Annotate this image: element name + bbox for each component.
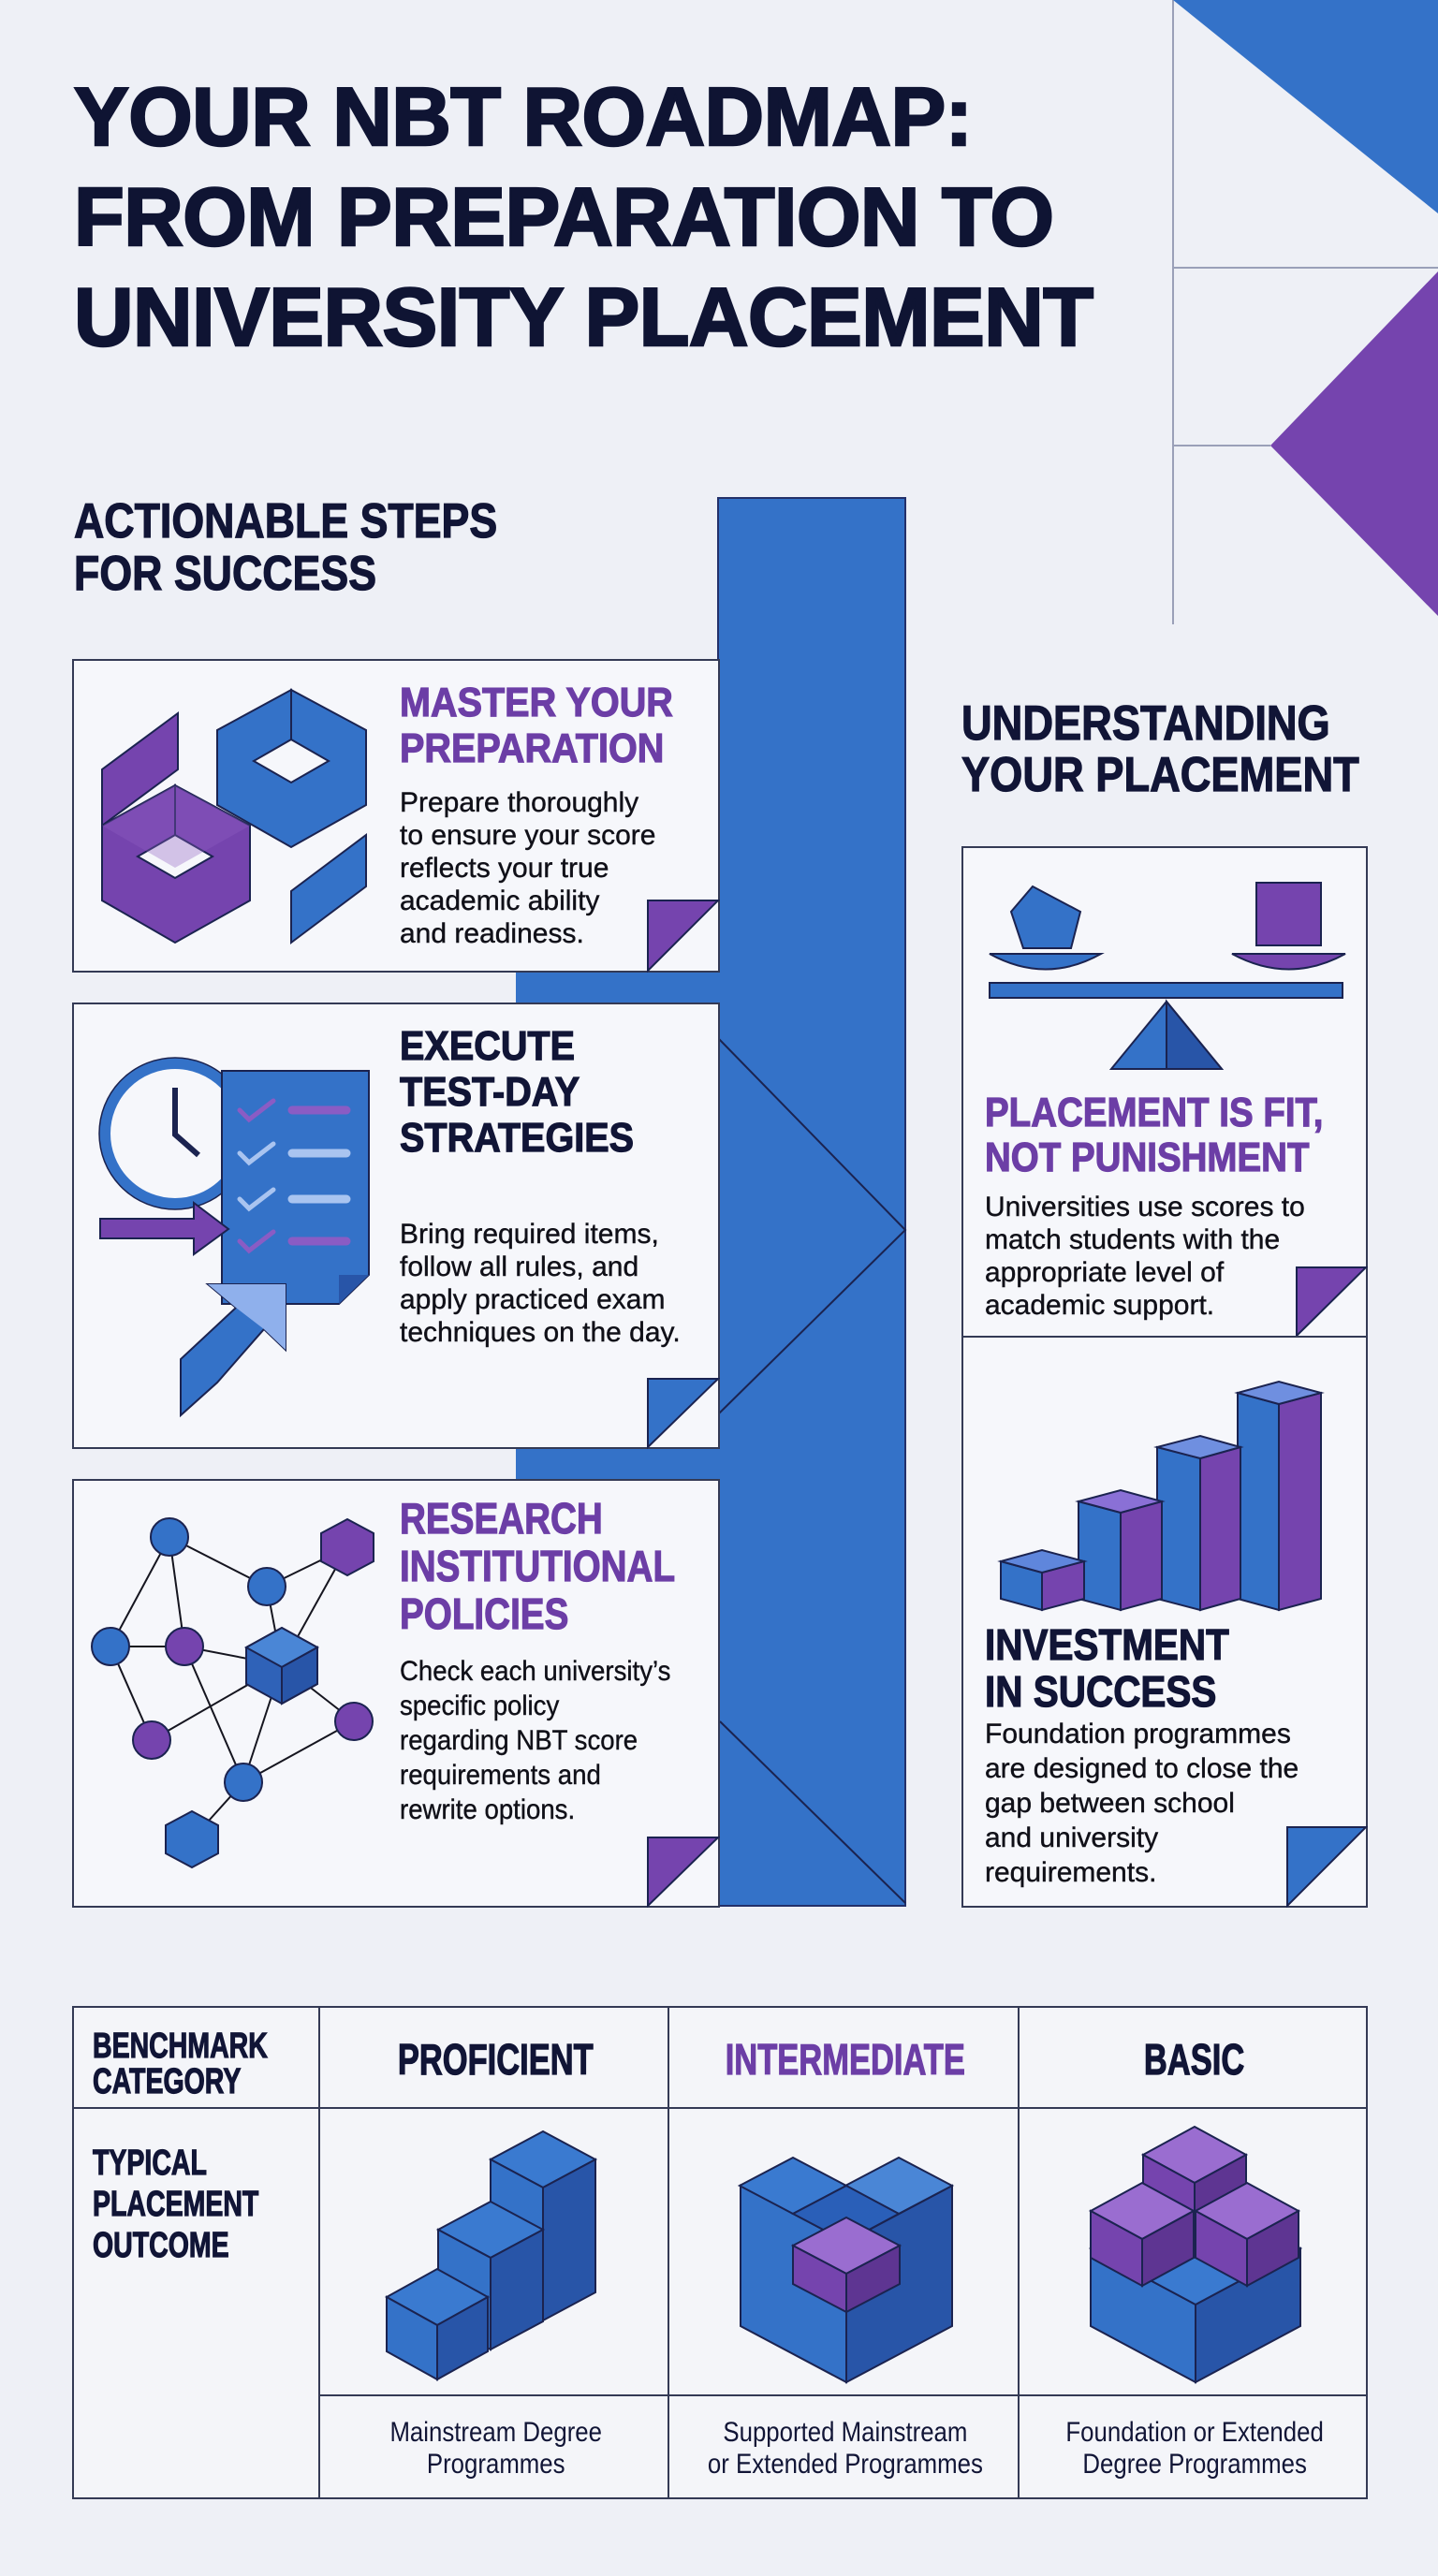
heading: IN SUCCESS bbox=[985, 1667, 1216, 1716]
panel: research institutional policies bbox=[72, 1479, 720, 1908]
body text: appropriate level of bbox=[985, 1257, 1224, 1288]
body text bbox=[400, 787, 655, 949]
heading: NOT PUNISHMENT bbox=[985, 1134, 1309, 1180]
body text: to ensure your score bbox=[400, 820, 655, 851]
panel: placement is fit bbox=[961, 846, 1368, 1338]
heading bbox=[399, 1023, 634, 1161]
column header: basic: BASIC bbox=[1144, 2035, 1245, 2084]
heading: PLACEMENT IS FIT, bbox=[985, 1090, 1323, 1135]
body text: are designed to close the bbox=[985, 1753, 1299, 1784]
body text: gap between school bbox=[985, 1788, 1235, 1819]
row label: benchmark category: BENCHMARK bbox=[93, 2027, 268, 2066]
heading bbox=[985, 1090, 1323, 1180]
row label: typical placement outcome bbox=[92, 2144, 258, 2265]
icon: interlocking rings bbox=[101, 688, 367, 944]
outcome: mainstream: Programmes bbox=[427, 2449, 565, 2479]
panel: master your preparation bbox=[72, 659, 720, 973]
corner fold bbox=[647, 900, 720, 973]
body text bbox=[985, 1719, 1299, 1888]
column header: proficient: PROFICIENT bbox=[398, 2035, 594, 2084]
row label: benchmark category bbox=[93, 2027, 268, 2101]
corner fold bbox=[1286, 1826, 1368, 1908]
heading: understanding your placement: YOUR PLACEMENT bbox=[961, 748, 1359, 802]
heading: actionable steps bbox=[74, 494, 497, 601]
heading: INSTITUTIONAL bbox=[400, 1542, 675, 1590]
panel: execute test-day strategies bbox=[72, 1003, 720, 1449]
body text: requirements and bbox=[400, 1760, 601, 1791]
title: UNIVERSITY PLACEMENT bbox=[74, 271, 1093, 363]
outcome: foundation: Degree Programmes bbox=[1082, 2449, 1307, 2479]
outcome: supported: or Extended Programmes bbox=[708, 2449, 983, 2479]
body text: match students with the bbox=[985, 1224, 1280, 1255]
icon: clock and checklist bbox=[98, 1057, 370, 1417]
body text: academic ability bbox=[400, 886, 599, 916]
icon: network bbox=[91, 1517, 374, 1868]
body text bbox=[985, 1192, 1305, 1321]
column header: intermediate: INTERMEDIATE bbox=[726, 2035, 965, 2084]
heading: understanding your placement: UNDERSTANDING bbox=[961, 696, 1330, 751]
outcome: mainstream bbox=[389, 2417, 602, 2479]
body text: requirements. bbox=[985, 1857, 1156, 1888]
table: benchmark categories bbox=[72, 2006, 1368, 2499]
blue roadmap bar bbox=[516, 497, 906, 1907]
row label: typical placement outcome: TYPICAL bbox=[93, 2144, 207, 2183]
heading bbox=[985, 1620, 1229, 1716]
icon: intermediate supported cubes bbox=[738, 2157, 954, 2384]
body text: Universities use scores to bbox=[985, 1192, 1305, 1222]
heading bbox=[400, 1494, 675, 1638]
panel: investment in success bbox=[961, 1336, 1368, 1908]
body text: techniques on the day. bbox=[400, 1317, 681, 1348]
outcome: supported: Supported Mainstream bbox=[723, 2417, 967, 2447]
body text: Prepare thoroughly bbox=[400, 787, 638, 818]
heading: understanding your placement bbox=[961, 696, 1359, 802]
body text: follow all rules, and bbox=[400, 1251, 638, 1282]
heading: TEST-DAY bbox=[400, 1069, 580, 1115]
title: FROM PREPARATION TO bbox=[74, 170, 1054, 263]
heading: PREPARATION bbox=[400, 725, 664, 771]
heading: MASTER YOUR bbox=[400, 680, 673, 725]
heading: EXECUTE bbox=[400, 1023, 575, 1069]
body text: specific policy bbox=[400, 1690, 559, 1721]
body text: regarding NBT score bbox=[400, 1725, 638, 1756]
row label: benchmark category: CATEGORY bbox=[93, 2062, 241, 2101]
heading: RESEARCH bbox=[400, 1494, 603, 1543]
outcome: foundation: Foundation or Extended bbox=[1065, 2417, 1324, 2447]
corner fold bbox=[647, 1378, 720, 1449]
body text: Bring required items, bbox=[400, 1219, 659, 1250]
icon: proficient staircase cubes bbox=[385, 2130, 597, 2381]
outcome: supported bbox=[708, 2417, 983, 2479]
body text: and university bbox=[985, 1822, 1158, 1853]
heading: actionable steps: FOR SUCCESS bbox=[74, 547, 376, 601]
heading: actionable steps: ACTIONABLE STEPS bbox=[74, 494, 497, 549]
body text bbox=[400, 1656, 670, 1825]
heading bbox=[400, 680, 673, 771]
decoration: top-right geometric bbox=[1172, 0, 1438, 624]
heading: POLICIES bbox=[400, 1589, 568, 1638]
icon: basic foundation cubes bbox=[1089, 2125, 1302, 2384]
row label: typical placement outcome: PLACEMENT bbox=[93, 2185, 258, 2224]
body text bbox=[400, 1219, 681, 1348]
icon: rising bar chart bbox=[997, 1381, 1325, 1612]
outcome: foundation bbox=[1065, 2417, 1324, 2479]
icon: balance scale bbox=[989, 882, 1346, 1070]
body text: academic support. bbox=[985, 1290, 1214, 1321]
heading: INVESTMENT bbox=[985, 1620, 1229, 1669]
corner fold bbox=[647, 1837, 720, 1908]
body text: Foundation programmes bbox=[985, 1719, 1291, 1749]
title bbox=[73, 70, 1093, 363]
title: YOUR NBT ROADMAP: bbox=[74, 70, 972, 163]
body text: and readiness. bbox=[400, 918, 584, 949]
outcome: mainstream: Mainstream Degree bbox=[389, 2417, 602, 2447]
row label: typical placement outcome: OUTCOME bbox=[93, 2226, 229, 2265]
body text: apply practiced exam bbox=[400, 1284, 665, 1315]
body text: rewrite options. bbox=[400, 1794, 575, 1825]
body text: reflects your true bbox=[400, 853, 609, 884]
corner fold bbox=[1296, 1266, 1368, 1336]
heading: STRATEGIES bbox=[400, 1115, 634, 1161]
body text: Check each university’s bbox=[400, 1656, 670, 1687]
